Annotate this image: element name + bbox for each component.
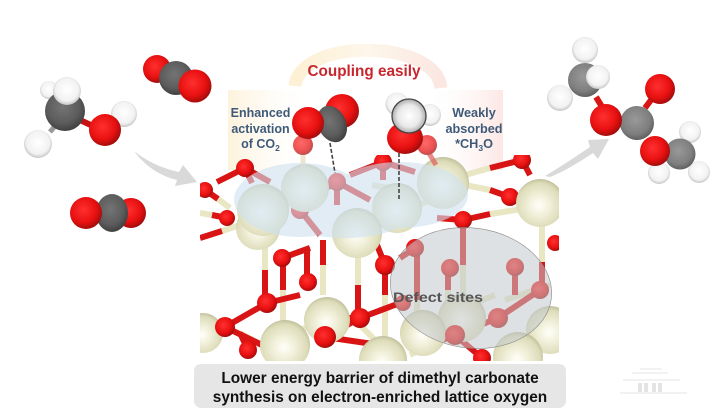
adsorbed CO2 xyxy=(292,94,359,147)
logo: faint building xyxy=(620,369,687,393)
label: enhanced activation of CO2: Enhanced xyxy=(231,106,290,120)
defect sites label: Defect sites xyxy=(393,289,483,305)
label: weakly absorbed CH3O: absorbed xyxy=(445,122,503,136)
dashed line CH3O xyxy=(398,153,400,200)
arrow: surface to product xyxy=(545,139,609,177)
label: enhanced activation of CO2: of CO xyxy=(241,137,280,153)
heading: coupling easily: Coupling easily xyxy=(307,63,421,80)
molecule: methanol xyxy=(24,77,137,158)
panel: right highlight xyxy=(425,90,503,170)
blue surface ellipses xyxy=(234,162,468,238)
coupling arc xyxy=(295,50,441,88)
caption banner xyxy=(194,364,566,408)
adsorbed CH3O xyxy=(386,92,441,154)
label: weakly absorbed CH3O: 3 xyxy=(478,143,483,153)
label: weakly absorbed CH3O: *CH xyxy=(455,137,493,153)
label: weakly absorbed CH3O: O xyxy=(483,137,493,151)
caption text: synthesis on electron-enriched lattice oxygen xyxy=(213,389,547,406)
label: enhanced activation of CO2: 2 xyxy=(275,143,280,153)
molecule: CO2 bottom xyxy=(70,194,146,232)
lattice bonds xyxy=(200,160,550,360)
arrow: reactants to surface xyxy=(134,151,197,186)
oxygen atoms: lattice xyxy=(197,151,563,367)
label: weakly absorbed CH3O: Weakly xyxy=(452,106,496,120)
front oxygen atoms xyxy=(215,293,508,348)
surface adsorption oxygen right xyxy=(417,135,437,165)
label: enhanced activation of CO2: activation xyxy=(231,122,290,136)
caption text: Lower energy barrier of dimethyl carbonate xyxy=(221,370,539,387)
panel: left highlight xyxy=(228,90,313,170)
lattice slab xyxy=(200,155,559,361)
metal atoms: lattice xyxy=(200,157,559,361)
defect sites ellipse xyxy=(382,217,560,359)
dashed line CO2 xyxy=(330,143,335,173)
molecule: dimethyl carbonate xyxy=(547,37,710,184)
molecule: CO2 top xyxy=(143,55,212,102)
surface adsorption oxygen left xyxy=(293,135,313,170)
